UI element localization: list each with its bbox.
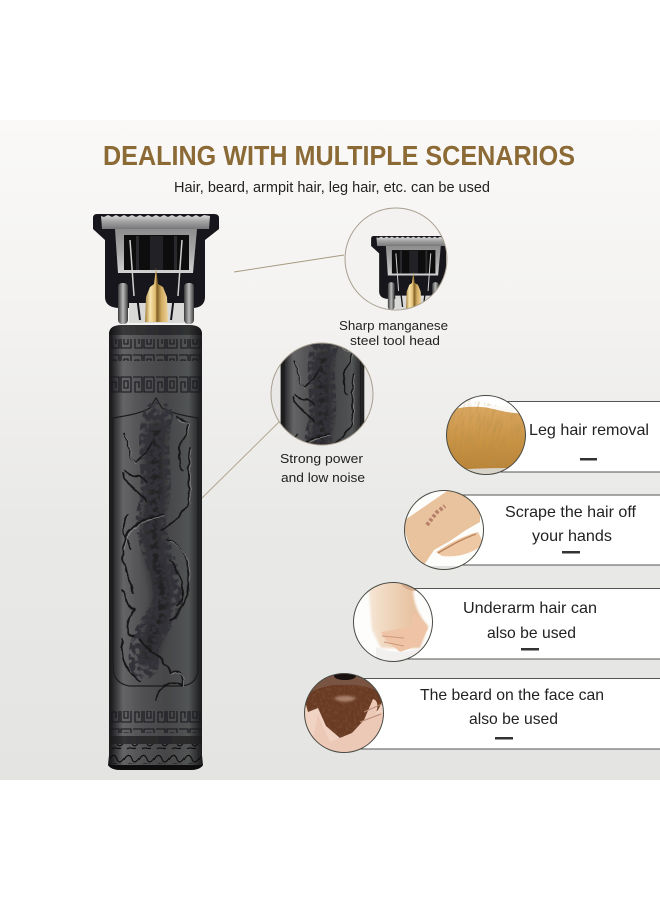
infographic canvas — [0, 120, 660, 780]
trimmer head — [93, 214, 219, 324]
title: DEALING WITH MULTIPLE SCENARIOS — [103, 140, 575, 171]
dragon outline lines — [122, 418, 191, 700]
text line 2: also be used — [487, 625, 576, 642]
dash — [562, 551, 580, 554]
dragon relief — [122, 416, 191, 700]
subtitle: Hair, beard, armpit hair, leg hair, etc. can be used — [174, 179, 490, 196]
label: Sharp manganese — [339, 318, 448, 333]
dragon shadow core — [148, 430, 162, 655]
dragon scale texture — [144, 416, 168, 664]
product: dragon trimmer — [93, 214, 219, 772]
photo: arm and hand — [402, 489, 484, 572]
leader line: body — [202, 420, 281, 498]
row: underarm hair — [354, 582, 660, 664]
text: Scrape the hair off — [505, 504, 637, 521]
dash — [495, 737, 513, 740]
row: face beard — [304, 672, 660, 754]
callout: strong power and low noise — [270, 342, 374, 466]
row: leg hair removal — [446, 395, 660, 475]
photo: underarm — [354, 582, 432, 664]
text: The beard on the face can — [420, 687, 604, 704]
dash — [580, 458, 597, 460]
photo: hairy leg — [446, 395, 526, 475]
label: Strong power — [280, 451, 364, 466]
trimmer body — [105, 322, 207, 772]
callout: sharp manganese steel tool head — [340, 208, 448, 332]
text line 2: your hands — [532, 528, 612, 545]
dash — [521, 648, 539, 650]
label line 2: steel tool head — [350, 333, 440, 348]
text line 2: also be used — [469, 711, 558, 728]
lens: zoomed tool head — [344, 208, 448, 310]
leader line: tool head — [234, 255, 344, 272]
label line 2: and low noise — [281, 470, 365, 485]
text: Leg hair removal — [529, 422, 649, 439]
text: Underarm hair can — [463, 600, 597, 617]
dragon panel frame — [113, 398, 198, 686]
photo: bearded face with hand — [304, 672, 384, 754]
row: scrape hair off hands — [402, 489, 660, 572]
lens: zoomed dragon body — [270, 342, 374, 446]
